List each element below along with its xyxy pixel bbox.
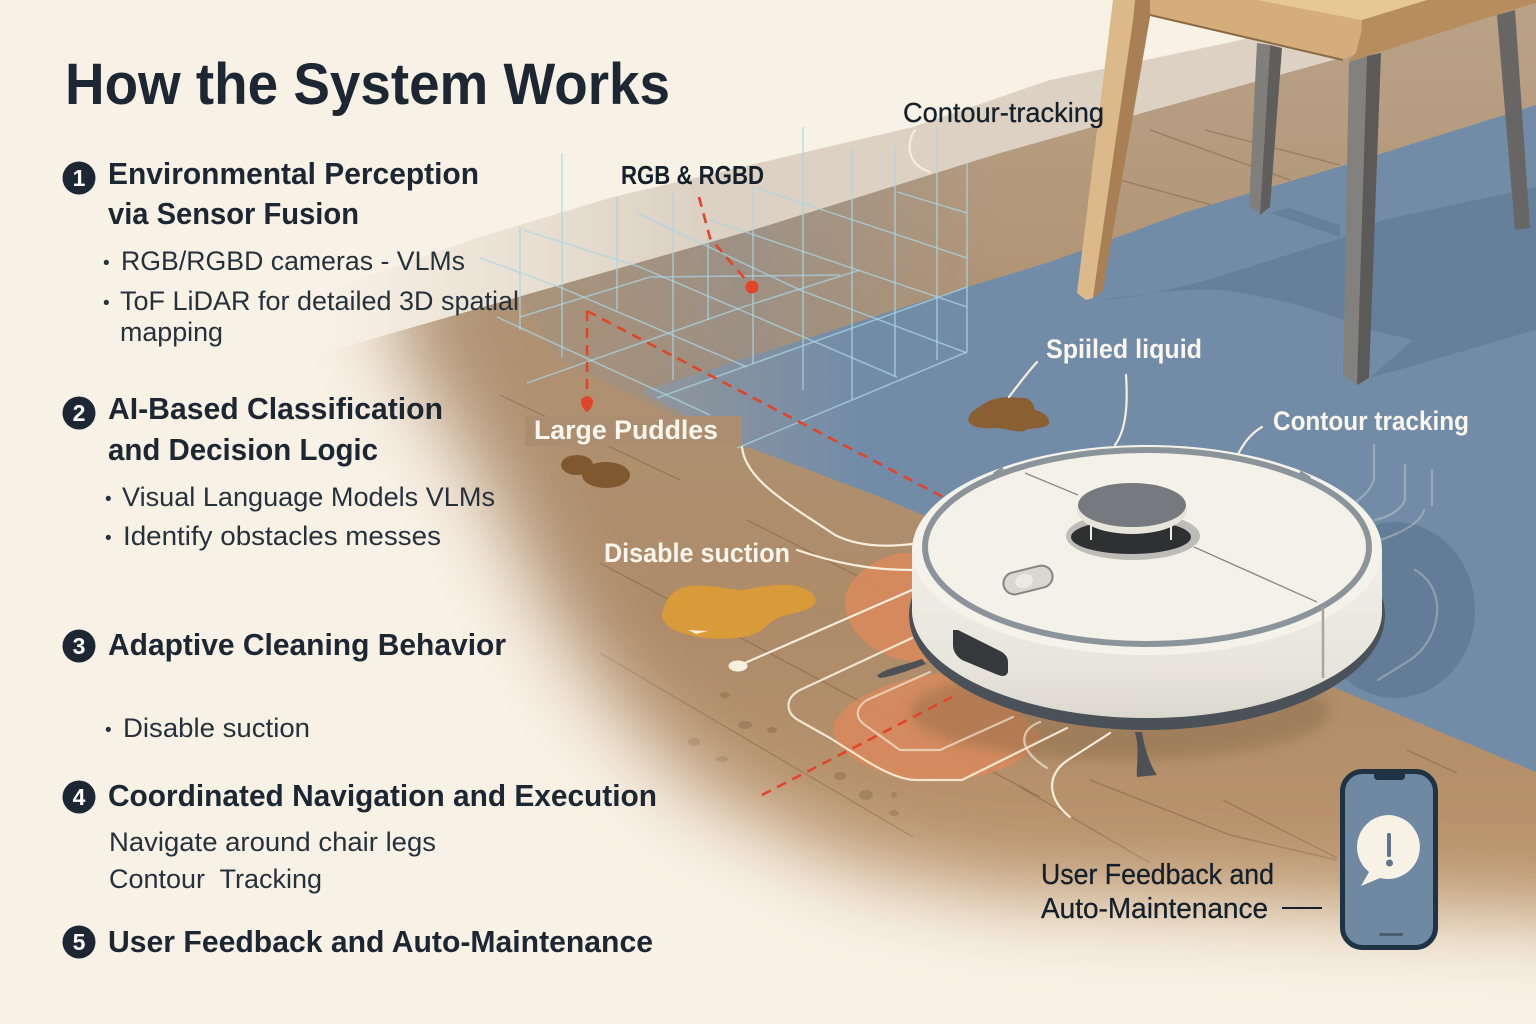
step 1 heading: via Sensor Fusion	[108, 196, 359, 231]
step 1 heading: Environmental Perception	[108, 156, 479, 191]
step 1 bullets: RGB/RGBD cameras - VLMs	[121, 246, 465, 276]
step 4 details	[109, 827, 436, 894]
step 4 details: Contour Tracking	[109, 864, 322, 894]
step 2 bullets: •	[105, 528, 112, 549]
button	[1001, 563, 1055, 597]
robot base	[909, 500, 1385, 730]
floor planks	[500, 130, 1457, 863]
label: disable suction: Disable suction	[604, 538, 790, 568]
chair shadows on rug	[1093, 187, 1536, 378]
number badge 3: 3	[73, 633, 85, 659]
label: contour tracking: Contour tracking	[1273, 406, 1469, 436]
front sensor window	[953, 630, 1008, 676]
label: large puddles: Large Puddles	[534, 415, 718, 445]
number badge 4: 4	[73, 784, 86, 810]
robot gray ring	[925, 450, 1369, 644]
step 2 heading: and Decision Logic	[108, 432, 378, 467]
robot body side	[912, 549, 1382, 718]
step 5	[62, 924, 653, 959]
step 2 bullets	[105, 482, 495, 551]
robot floor shadow	[910, 664, 1330, 760]
number badge 2	[62, 396, 96, 430]
step 1 bullets: •	[103, 293, 110, 314]
3D sensor grid	[480, 127, 967, 448]
step 4	[62, 778, 657, 894]
robot top surface	[912, 445, 1382, 655]
room scene	[346, 0, 1536, 974]
title: How the System Works	[65, 52, 670, 117]
step 2 bullets: •	[105, 489, 112, 510]
label: user feedback: User Feedback and	[1041, 859, 1274, 891]
label: spilled liquid: Spiiled liquid	[1046, 334, 1202, 364]
number badge 2: 2	[73, 400, 85, 426]
alert bubble	[1357, 815, 1420, 886]
step 4 heading: Coordinated Navigation and Execution	[108, 778, 657, 813]
metal leg front	[1343, 53, 1381, 385]
step 2	[62, 391, 495, 551]
lidar turret	[1066, 483, 1200, 560]
step 4 details: Navigate around chair legs	[109, 827, 436, 857]
metal leg far right	[1497, 10, 1530, 230]
number badge 5	[62, 926, 96, 958]
floor shading under grid	[530, 180, 915, 450]
top seams	[994, 468, 1323, 678]
seat	[1150, 0, 1536, 62]
step 2 bullets: Visual Language Models VLMs	[122, 482, 495, 512]
red dashed sensing lines	[581, 197, 952, 795]
phone icon	[1342, 771, 1436, 948]
step 3 bullet: Disable suction	[123, 713, 310, 743]
label: user feedback: Auto-Maintenance	[1041, 893, 1268, 925]
number badge 1	[62, 162, 96, 194]
step 5 heading: User Feedback and Auto-Maintenance	[108, 924, 653, 959]
wooden leg	[1077, 0, 1150, 300]
number badge 3	[62, 630, 96, 662]
number badge 4	[62, 780, 96, 814]
floor specks	[688, 692, 899, 816]
puddle: large brown	[561, 455, 630, 488]
metal leg back	[1249, 43, 1282, 215]
step 1 bullets	[103, 246, 519, 347]
side brushes	[877, 659, 1157, 777]
blue rug	[640, 105, 1536, 772]
chair	[1077, 0, 1536, 385]
step 3	[62, 627, 506, 743]
step 1 bullets: mapping	[120, 317, 223, 347]
step 2 heading: AI-Based Classification	[108, 391, 443, 426]
label: contour-tracking: Contour-tracking	[903, 97, 1104, 128]
robot vacuum	[909, 445, 1385, 730]
wall baseboard	[320, 0, 1536, 354]
step 1	[62, 156, 519, 347]
step 1 bullets: •	[103, 253, 110, 274]
orange zone upper	[845, 553, 960, 662]
step 1 heading	[108, 156, 479, 231]
orange zone lower	[833, 672, 1040, 781]
label: RGB and RGBD: RGB & RGBD	[621, 160, 764, 190]
wooden floor	[346, 3, 1536, 974]
white path lines	[728, 130, 1437, 817]
step 3 bullet: •	[105, 720, 112, 741]
phone notch	[1374, 771, 1405, 780]
step 1 bullets: ToF LiDAR for detailed 3D spatial	[120, 286, 519, 316]
spill: yellow liquid	[662, 585, 816, 639]
label: user feedback	[1041, 859, 1322, 925]
spill: brown on rug	[968, 397, 1049, 431]
number badge 1: 1	[73, 165, 86, 191]
step 3 heading: Adaptive Cleaning Behavior	[108, 627, 506, 662]
step 2 heading	[108, 391, 443, 467]
robot shadow on rug	[1315, 522, 1475, 698]
number badge 5: 5	[73, 929, 86, 955]
phone home bar	[1379, 933, 1403, 936]
step 2 bullets: Identify obstacles messes	[123, 521, 441, 551]
